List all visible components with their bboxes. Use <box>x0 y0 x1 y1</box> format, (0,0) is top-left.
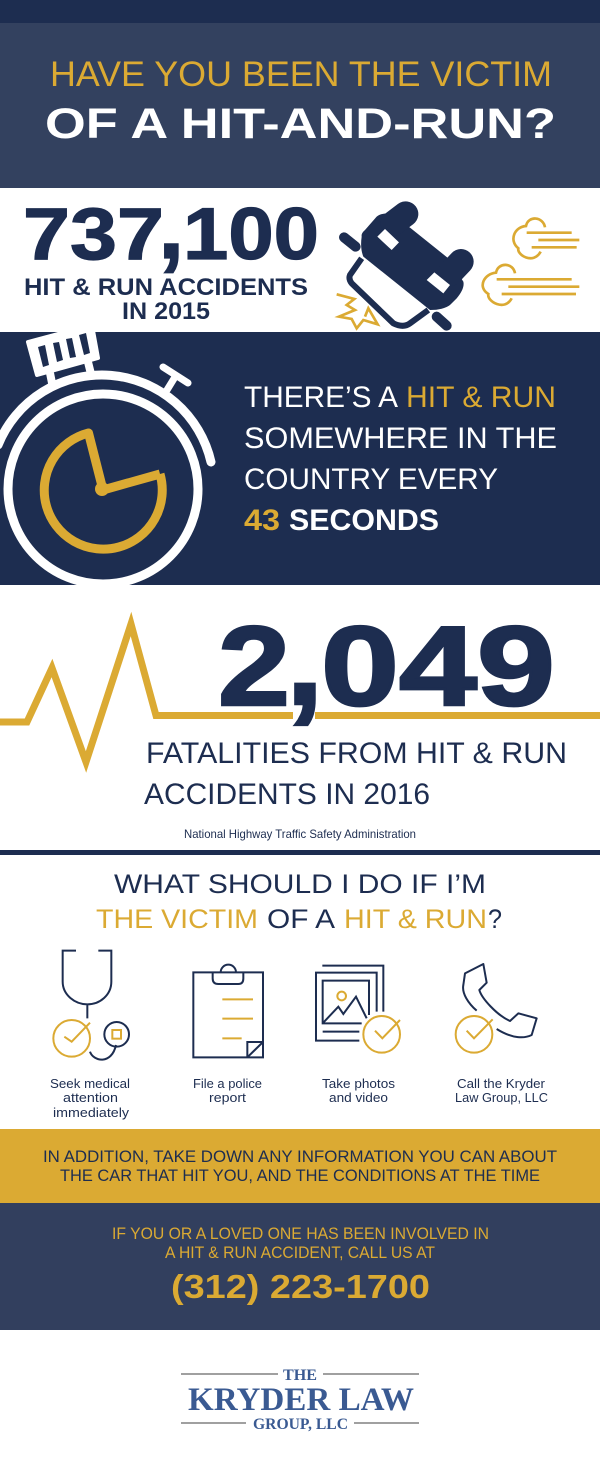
source citation: National Highway Traffic Safety Administration <box>184 827 416 841</box>
label: seek medical attention: attention <box>63 1091 118 1105</box>
logo: The Kryder Law Group, LLC: KRYDER LAW <box>188 1382 414 1418</box>
statistic number: , <box>286 582 324 733</box>
panel: call to action: A HIT & RUN ACCIDENT, CALL US AT <box>165 1244 435 1262</box>
statement text: SOMEWHERE IN THE <box>244 422 557 455</box>
statistic number: 737 <box>23 194 164 275</box>
heading line 2: OF A HIT-AND-RUN? <box>45 100 556 148</box>
label: call the law group: Call the Kryder <box>457 1077 545 1091</box>
statement text <box>244 381 557 537</box>
statistic caption: IN 2015 <box>122 298 210 325</box>
icon: telephone <box>456 964 537 1053</box>
panel: 2,049 fatalities <box>0 582 600 841</box>
logo: The Kryder Law Group, LLC: GROUP, LLC <box>253 1416 348 1433</box>
heading line 1: HAVE YOU BEEN THE VICTIM <box>50 55 552 94</box>
chart: heartbeat line <box>0 624 600 762</box>
label: take photos and video: and video <box>329 1091 388 1105</box>
label: file a police report: File a police <box>193 1077 262 1091</box>
statistic caption: HIT & RUN ACCIDENTS <box>24 274 308 301</box>
section heading: HIT & RUN <box>344 904 487 934</box>
logo: The Kryder Law Group, LLC: THE <box>283 1367 317 1384</box>
icon: photos <box>316 966 400 1053</box>
panel: call to action <box>0 1203 600 1330</box>
panel: what should I do <box>50 869 548 1120</box>
panel: title header <box>0 0 600 188</box>
statistic caption: FATALITIES FROM HIT & RUN <box>146 737 567 770</box>
icon: stethoscope <box>53 951 129 1060</box>
section heading: THE VICTIM <box>96 904 258 934</box>
panel: every 43 seconds <box>0 325 600 585</box>
statement text: 43 <box>244 504 280 537</box>
label: call the law group: Law Group, LLC <box>455 1091 548 1105</box>
statistic number: 100 <box>183 194 319 275</box>
statement text: SECONDS <box>289 504 439 537</box>
icon: wind gusts <box>483 219 579 305</box>
statement text: COUNTRY EVERY <box>244 463 498 496</box>
statistic caption: ACCIDENTS IN 2016 <box>144 778 430 811</box>
panel: call to action: IF YOU OR A LOVED ONE HAS BEEN INVOLVED IN <box>112 1225 489 1243</box>
statistic number <box>218 582 555 733</box>
label: file a police report: report <box>209 1091 247 1105</box>
icon: overturned car <box>337 213 464 328</box>
statement text: HIT & RUN <box>406 381 556 414</box>
statement text: THERE’S A <box>244 381 398 414</box>
statistic number: , <box>158 173 184 279</box>
label: seek medical attention: immediately <box>53 1106 130 1120</box>
icon: clipboard <box>193 965 263 1057</box>
panel: additional advice banner: THE CAR THAT HIT YOU, AND THE CONDITIONS AT THE TIME <box>60 1167 540 1185</box>
icon: stopwatch <box>0 325 211 584</box>
label: seek medical attention <box>50 1077 130 1120</box>
statistic caption <box>144 737 567 811</box>
section heading: WHAT SHOULD I DO IF I’M <box>114 869 486 899</box>
statistic number: 2 <box>218 603 290 729</box>
logo: The Kryder Law Group, LLC <box>181 1367 419 1433</box>
label: take photos and video: Take photos <box>322 1077 395 1091</box>
phone number: (312) 223-1700 <box>171 1268 430 1305</box>
statistic number <box>23 173 319 279</box>
statistic number: 049 <box>321 603 555 729</box>
label: take photos and video <box>322 1077 395 1105</box>
label: seek medical attention: Seek medical <box>50 1077 130 1091</box>
section heading: ? <box>488 904 502 934</box>
section heading: OF A <box>267 904 335 934</box>
section heading <box>96 869 502 934</box>
panel: 737,100 accidents <box>23 173 579 328</box>
panel: additional advice banner: IN ADDITION, TAKE DOWN ANY INFORMATION YOU CAN ABOUT <box>43 1148 557 1166</box>
statistic caption <box>24 274 308 325</box>
label: call the law group <box>455 1077 548 1105</box>
label: file a police report <box>193 1077 262 1105</box>
panel: additional advice banner <box>0 1129 600 1203</box>
